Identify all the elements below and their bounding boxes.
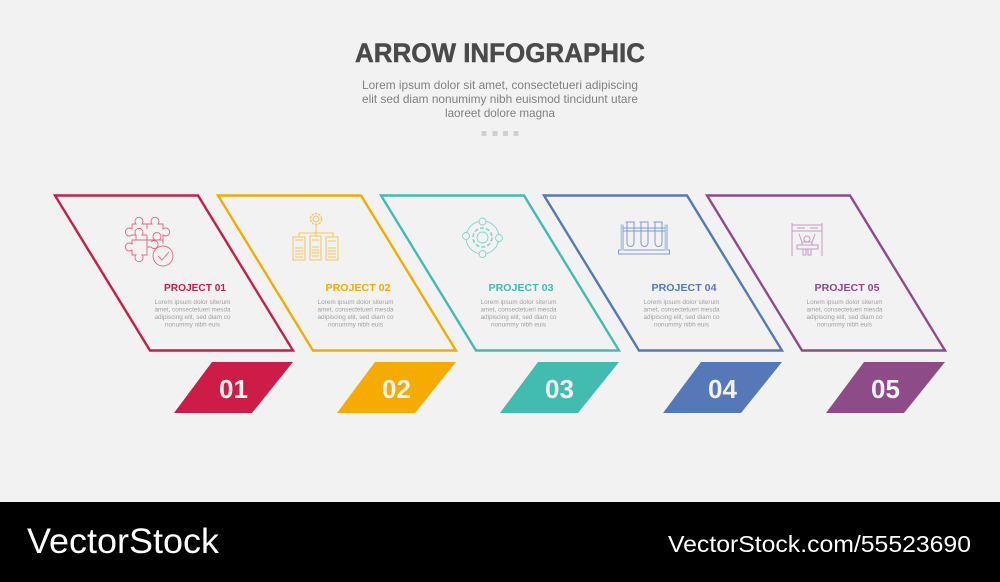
description 05: nonummy nibh euis xyxy=(817,322,872,328)
number 05: 05 xyxy=(871,374,900,404)
description 01 xyxy=(154,299,231,328)
number tab 02 xyxy=(337,362,456,413)
project label 03: PROJECT 03 xyxy=(488,282,554,294)
footer logo: VectorStock xyxy=(27,522,220,561)
number 01: 01 xyxy=(219,374,248,404)
outline 02 xyxy=(218,196,456,350)
description 01: Lorem ipsum dolor siterum xyxy=(154,299,230,306)
description 03: nonummy nibh euis xyxy=(491,322,546,328)
description 04: Lorem ipsum dolor siterum xyxy=(644,299,720,306)
subtitle text xyxy=(362,78,638,120)
icon: puzzle with check xyxy=(125,217,173,266)
description 01: nonummy nibh euis xyxy=(165,322,220,328)
description 03 xyxy=(480,299,557,328)
description 02: adipiscing elit, sed diam co xyxy=(318,314,394,321)
description 03: adipiscing elit, sed diam co xyxy=(480,314,557,321)
description 01: amet, consectetueri mesda xyxy=(154,306,231,314)
description 04: nonummy nibh euis xyxy=(654,322,709,328)
project label 02: PROJECT 02 xyxy=(326,282,391,294)
number tab 04 xyxy=(663,362,782,413)
description 04 xyxy=(644,299,720,328)
title dots xyxy=(482,131,518,136)
number 04: 04 xyxy=(708,374,737,404)
description 02: amet, consectetueri mesda xyxy=(318,306,394,314)
number tab 01 xyxy=(174,362,293,413)
description 03: Lorem ipsum dolor siterum xyxy=(480,299,556,306)
outline 05 xyxy=(707,196,945,350)
panel: project 02 xyxy=(218,196,456,413)
description 04: amet, consectetueri mesda xyxy=(644,306,720,314)
icon: server hierarchy with gear xyxy=(293,214,338,260)
description 03: amet, consectetueri mesda xyxy=(480,306,557,314)
outline 01 xyxy=(55,196,293,350)
outline 03 xyxy=(381,196,619,350)
description 05: Lorem ipsum dolor siterum xyxy=(806,299,882,306)
description 05: amet, consectetueri mesda xyxy=(806,306,883,314)
number tab 05 xyxy=(826,362,945,413)
number 02: 02 xyxy=(382,374,411,404)
project label 01: PROJECT 01 xyxy=(164,282,226,294)
description 02: Lorem ipsum dolor siterum xyxy=(318,299,394,306)
panel: project 04 xyxy=(544,196,782,413)
outline 04 xyxy=(544,196,782,350)
panel: project 03 xyxy=(381,196,619,413)
icon: person at finish line xyxy=(792,223,822,256)
icon: test tube rack xyxy=(618,222,670,254)
description 04: adipiscing elit, sed diam co xyxy=(644,314,720,321)
number 03: 03 xyxy=(545,374,574,404)
description 01: adipiscing elit, sed diam co xyxy=(154,314,231,321)
footer url: VectorStock.com/55523690 xyxy=(668,531,971,557)
panel: project 01 xyxy=(55,196,293,413)
project label 05: PROJECT 05 xyxy=(814,282,880,294)
footer bar xyxy=(0,502,1000,582)
description 02: nonummy nibh euis xyxy=(328,322,383,328)
description 02 xyxy=(318,299,394,328)
subtitle text: elit sed diam nonumimy nibh euismod tincidunt utare xyxy=(362,92,638,106)
project label 04: PROJECT 04 xyxy=(652,282,717,294)
description 05 xyxy=(806,299,883,328)
number tab 03 xyxy=(500,362,619,413)
subtitle text: laoreet dolore magna xyxy=(445,106,555,120)
description 05: adipiscing elit, sed diam co xyxy=(806,314,883,321)
title: ARROW INFOGRAPHIC xyxy=(355,38,645,68)
panel: project 05 xyxy=(707,196,945,413)
subtitle text: Lorem ipsum dolor sit amet, consectetueri adipiscing xyxy=(362,78,638,92)
icon: gear in ring with checks xyxy=(462,218,502,258)
